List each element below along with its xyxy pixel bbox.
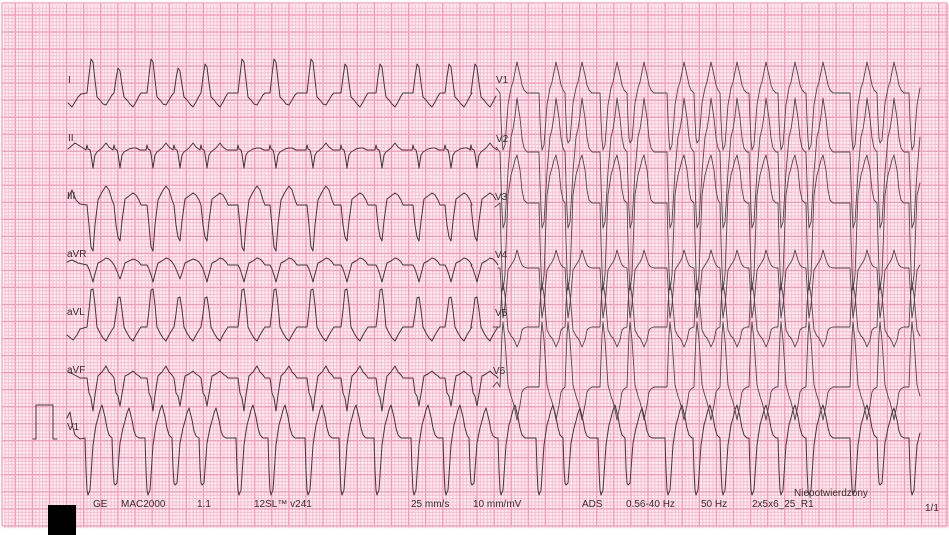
black square marker xyxy=(48,505,76,535)
text: unconfirmed note: Niepotwierdzony xyxy=(794,488,868,499)
trace: lead V1 xyxy=(496,62,920,150)
text: filter band: 0.56-40 Hz xyxy=(626,499,675,510)
label: V5: V5 xyxy=(495,308,508,319)
label: V1: V1 xyxy=(496,75,509,86)
label: V2: V2 xyxy=(496,134,509,145)
trace: lead V5 xyxy=(493,283,920,347)
label: I: I xyxy=(68,75,71,86)
trace: lead V2 xyxy=(496,98,920,228)
text: paper speed: 25 mm/s xyxy=(411,499,449,510)
text: GE: GE xyxy=(93,499,108,510)
text: MAC2000: MAC2000 xyxy=(121,499,166,510)
label: V1 strip: V1 xyxy=(67,422,80,433)
text: version 1.1: 1.1 xyxy=(197,499,211,510)
label: V6: V6 xyxy=(493,366,506,377)
trace: lead aVR xyxy=(67,258,498,282)
trace: lead I xyxy=(68,59,496,107)
calibration pulse xyxy=(33,405,57,439)
trace: lead aVF xyxy=(68,366,498,411)
text: format code: 2x5x6_25_R1 xyxy=(752,499,814,510)
label: V4: V4 xyxy=(495,250,508,261)
trace: lead III xyxy=(68,186,496,251)
label: aVF: aVF xyxy=(67,365,85,376)
label: II: II xyxy=(68,133,74,144)
trace: lead II xyxy=(68,143,497,168)
trace: lead aVL xyxy=(67,289,498,341)
trace: lead V6 xyxy=(493,322,920,420)
panel: limb leads column xyxy=(67,59,498,411)
text: gain: 10 mm/mV xyxy=(473,499,522,510)
trace: lead V3 xyxy=(495,155,920,290)
trace: lead V4 xyxy=(498,250,920,318)
text: 12SL version: 12SL™ v241 xyxy=(254,499,312,510)
label: aVL: aVL xyxy=(67,307,85,318)
label: V3: V3 xyxy=(495,192,508,203)
panel: precordial leads column xyxy=(493,62,920,420)
text: mains filter: 50 Hz xyxy=(701,499,727,510)
footer: device and recording settings xyxy=(93,488,939,514)
text: ADS: ADS xyxy=(582,499,603,510)
label: III: III xyxy=(67,191,75,202)
text: page number: 1/1 xyxy=(925,503,939,514)
trace: V1 rhythm xyxy=(67,405,920,495)
panel: V1 rhythm strip xyxy=(67,405,920,495)
label: aVR: aVR xyxy=(67,249,86,260)
